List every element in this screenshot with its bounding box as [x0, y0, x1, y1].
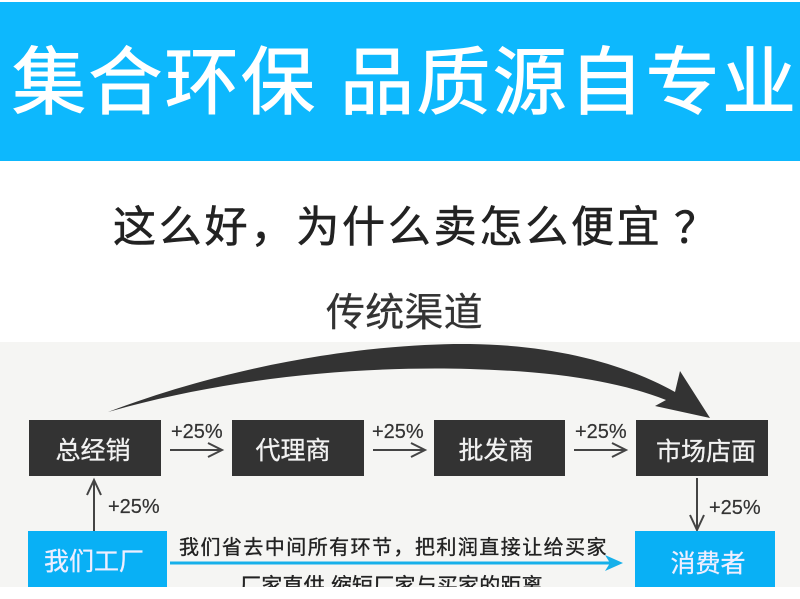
arrow: store to consumer	[690, 478, 761, 530]
direct arrow head	[605, 555, 623, 571]
arrow: wholesaler to store: +25%	[575, 421, 627, 443]
question heading: 这么好，为什么卖怎么便宜	[113, 204, 663, 252]
box: agent	[232, 420, 364, 476]
box: general distributor: 总经销	[55, 437, 131, 465]
arrow: distributor to agent	[170, 421, 223, 457]
arrow: agent to wholesaler	[372, 421, 425, 457]
box: wholesaler	[434, 420, 565, 476]
box: general distributor	[29, 420, 161, 476]
section heading: traditional channel: 传统渠道	[326, 292, 483, 335]
arrow: store to consumer: +25%	[709, 497, 761, 519]
question mark: ？	[674, 205, 717, 253]
note: savings: 我们省去中间所有环节，把利润直接让给买家	[179, 536, 608, 559]
box: our factory: 我们工厂	[44, 548, 144, 576]
note: factory direct: 厂家直供 缩短厂家与买家的距离	[240, 575, 543, 598]
panel: channel diagram	[0, 342, 800, 587]
arrow: factory to distributor: +25%	[108, 496, 160, 518]
header banner	[0, 2, 800, 161]
direct arrow	[170, 562, 615, 564]
banner title second part: 品质源自专业	[340, 41, 798, 124]
arrow: factory to distributor	[87, 480, 160, 531]
arrow: distributor to agent: +25%	[171, 421, 223, 443]
banner title: 集合环保	[12, 41, 317, 124]
box: wholesaler: 批发商	[458, 437, 534, 465]
arrow: wholesaler to store	[574, 421, 627, 457]
box: market store: 市场店面	[656, 438, 756, 466]
box: our factory	[28, 531, 167, 587]
bottom white strip	[0, 587, 800, 599]
arrow: agent to wholesaler: +25%	[372, 421, 424, 443]
box: market store	[636, 420, 768, 476]
curved arrow	[108, 344, 710, 418]
box: consumer	[635, 531, 775, 587]
box: agent: 代理商	[255, 437, 331, 465]
box: consumer: 消费者	[670, 550, 746, 578]
